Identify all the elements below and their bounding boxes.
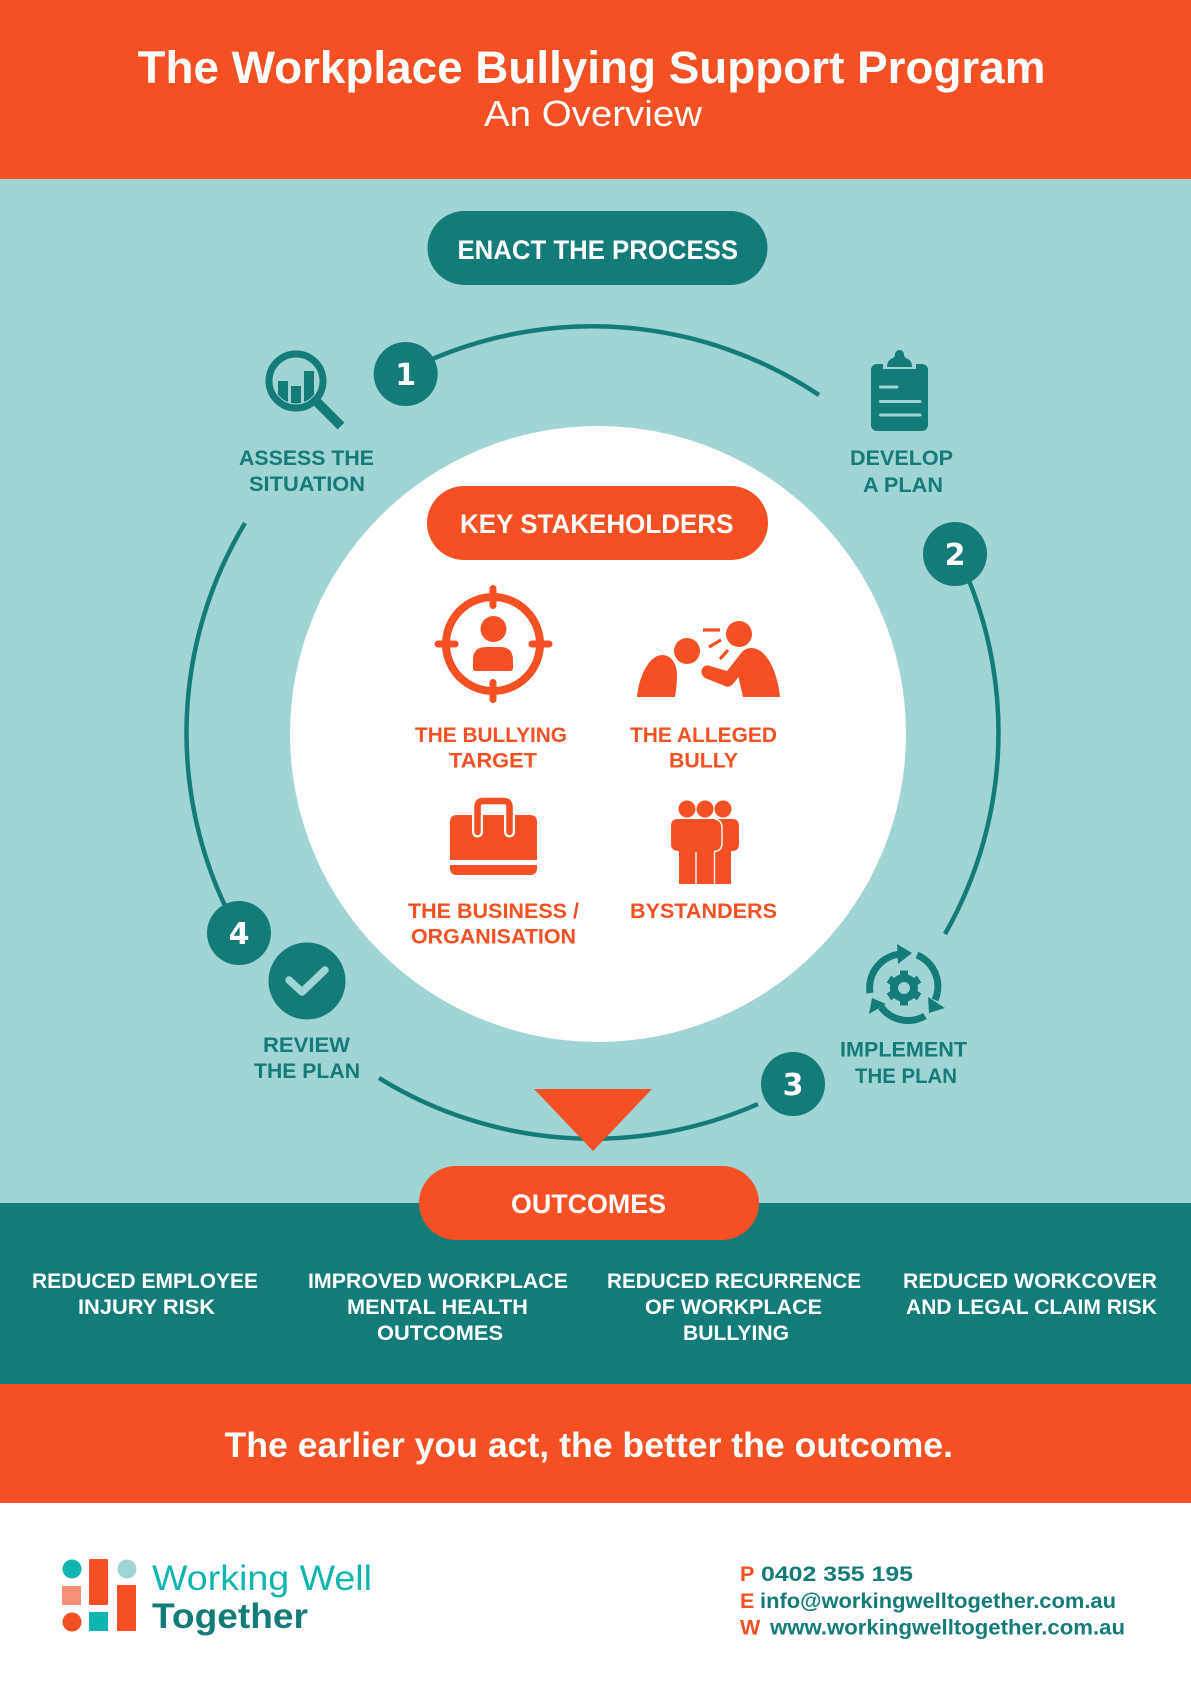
stakeholder label: the alleged bully: THE ALLEGED bbox=[630, 724, 777, 747]
banner: tagline bbox=[0, 1384, 1191, 1503]
stakeholder label: the alleged bully bbox=[630, 724, 777, 772]
stakeholder label: the business / organisation bbox=[408, 900, 579, 948]
background: process section bbox=[0, 179, 1191, 1203]
pill: enact the process bbox=[428, 211, 768, 285]
stakeholder label: the bullying target bbox=[415, 724, 567, 772]
outcome: reduced employee injury risk: REDUCED EMPLOYEE bbox=[32, 1270, 258, 1293]
icon: gear with cycle arrows bbox=[869, 944, 945, 1020]
arrow: down to outcomes bbox=[534, 1089, 652, 1151]
header band bbox=[0, 0, 1191, 179]
outcome: reduced recurrence of bullying: REDUCED RECURRENCE bbox=[607, 1270, 861, 1293]
contact details: W bbox=[740, 1616, 761, 1640]
title: The Workplace Bullying Support Program bbox=[138, 42, 1046, 93]
step label: implement the plan bbox=[840, 1038, 967, 1088]
step 2 badge bbox=[923, 522, 987, 586]
contact details: info@workingwelltogether.com.au bbox=[760, 1589, 1116, 1613]
step label: assess the situation: ASSESS THE bbox=[239, 447, 374, 470]
stakeholder label: the business / organisation: ORGANISATION bbox=[411, 926, 576, 948]
step label: review the plan: REVIEW bbox=[263, 1034, 350, 1057]
subtitle: An Overview bbox=[484, 93, 703, 134]
step label: assess the situation bbox=[239, 447, 374, 496]
logo: Working Well Together: Working Well bbox=[152, 1559, 372, 1598]
step label: review the plan bbox=[254, 1034, 360, 1083]
step 4 badge: 4 bbox=[229, 917, 249, 952]
step 4 badge bbox=[207, 901, 271, 965]
step label: implement the plan: THE PLAN bbox=[855, 1065, 957, 1088]
outcome: reduced recurrence of bullying bbox=[607, 1270, 861, 1345]
step label: develop a plan bbox=[850, 447, 953, 497]
step label: review the plan: THE PLAN bbox=[254, 1060, 360, 1083]
icon: magnifier with chart bbox=[269, 354, 341, 426]
outcome: reduced recurrence of bullying: BULLYING bbox=[683, 1322, 789, 1345]
icon: bullying target bbox=[434, 585, 552, 703]
contact details: 0402 355 195 bbox=[761, 1562, 913, 1586]
outcome: improved workplace mental health: OUTCOMES bbox=[377, 1322, 503, 1345]
stakeholder label: the bullying target: THE BULLYING bbox=[415, 724, 567, 747]
icon: bystanders bbox=[671, 800, 739, 884]
contact details: www.workingwelltogether.com.au bbox=[769, 1616, 1125, 1640]
step label: implement the plan: IMPLEMENT bbox=[840, 1038, 967, 1062]
step 3 badge: 3 bbox=[783, 1068, 803, 1103]
pill: key stakeholders: KEY STAKEHOLDERS bbox=[460, 509, 734, 539]
outcome: improved workplace mental health: IMPROVED WORKPLACE bbox=[308, 1270, 568, 1293]
contact details: P bbox=[740, 1562, 754, 1586]
logo: Working Well Together bbox=[62, 1559, 372, 1636]
step label: develop a plan: DEVELOP bbox=[850, 447, 953, 470]
outcome: reduced employee injury risk bbox=[32, 1270, 258, 1319]
step label: assess the situation: SITUATION bbox=[249, 473, 365, 496]
outcome: improved workplace mental health: MENTAL HEALTH bbox=[347, 1296, 528, 1319]
logo: Working Well Together: Together bbox=[152, 1597, 308, 1636]
outcome: reduced workcover and legal claim risk: REDUCED WORKCOVER bbox=[903, 1270, 1157, 1293]
icon: briefcase bbox=[450, 801, 537, 875]
stakeholder label: bystanders: BYSTANDERS bbox=[630, 900, 777, 923]
step 2 badge: 2 bbox=[945, 538, 965, 573]
step 1 badge: 1 bbox=[395, 358, 416, 393]
icon: clipboard bbox=[871, 350, 928, 431]
pill: enact the process: ENACT THE PROCESS bbox=[458, 235, 738, 265]
stakeholder label: the alleged bully: BULLY bbox=[669, 750, 738, 772]
stakeholder label: the business / organisation: THE BUSINESS / bbox=[408, 900, 579, 923]
step 3 badge bbox=[761, 1052, 825, 1116]
pill: key stakeholders bbox=[427, 486, 768, 560]
icon: check mark bbox=[268, 942, 346, 1020]
contact details bbox=[740, 1562, 1125, 1640]
outcome: reduced employee injury risk: INJURY RISK bbox=[78, 1296, 215, 1319]
contact details: E bbox=[740, 1589, 754, 1613]
step 1 badge bbox=[374, 342, 438, 406]
panel: outcomes bbox=[0, 1203, 1191, 1384]
icon: alleged bully bbox=[637, 621, 780, 697]
stakeholder label: the bullying target: TARGET bbox=[449, 750, 537, 772]
outcome: reduced recurrence of bullying: OF WORKPLACE bbox=[645, 1296, 822, 1319]
process ring arcs bbox=[187, 326, 998, 1139]
step label: develop a plan: A PLAN bbox=[863, 474, 943, 497]
stakeholders circle bbox=[290, 426, 906, 1042]
banner: tagline: The earlier you act, the better the outcome. bbox=[224, 1426, 953, 1465]
outcome: reduced workcover and legal claim risk: AND LEGAL CLAIM RISK bbox=[906, 1296, 1157, 1319]
pill: outcomes: OUTCOMES bbox=[511, 1189, 666, 1219]
pill: outcomes bbox=[419, 1166, 759, 1240]
outcome: improved workplace mental health bbox=[308, 1270, 568, 1345]
outcome: reduced workcover and legal claim risk bbox=[903, 1270, 1157, 1319]
